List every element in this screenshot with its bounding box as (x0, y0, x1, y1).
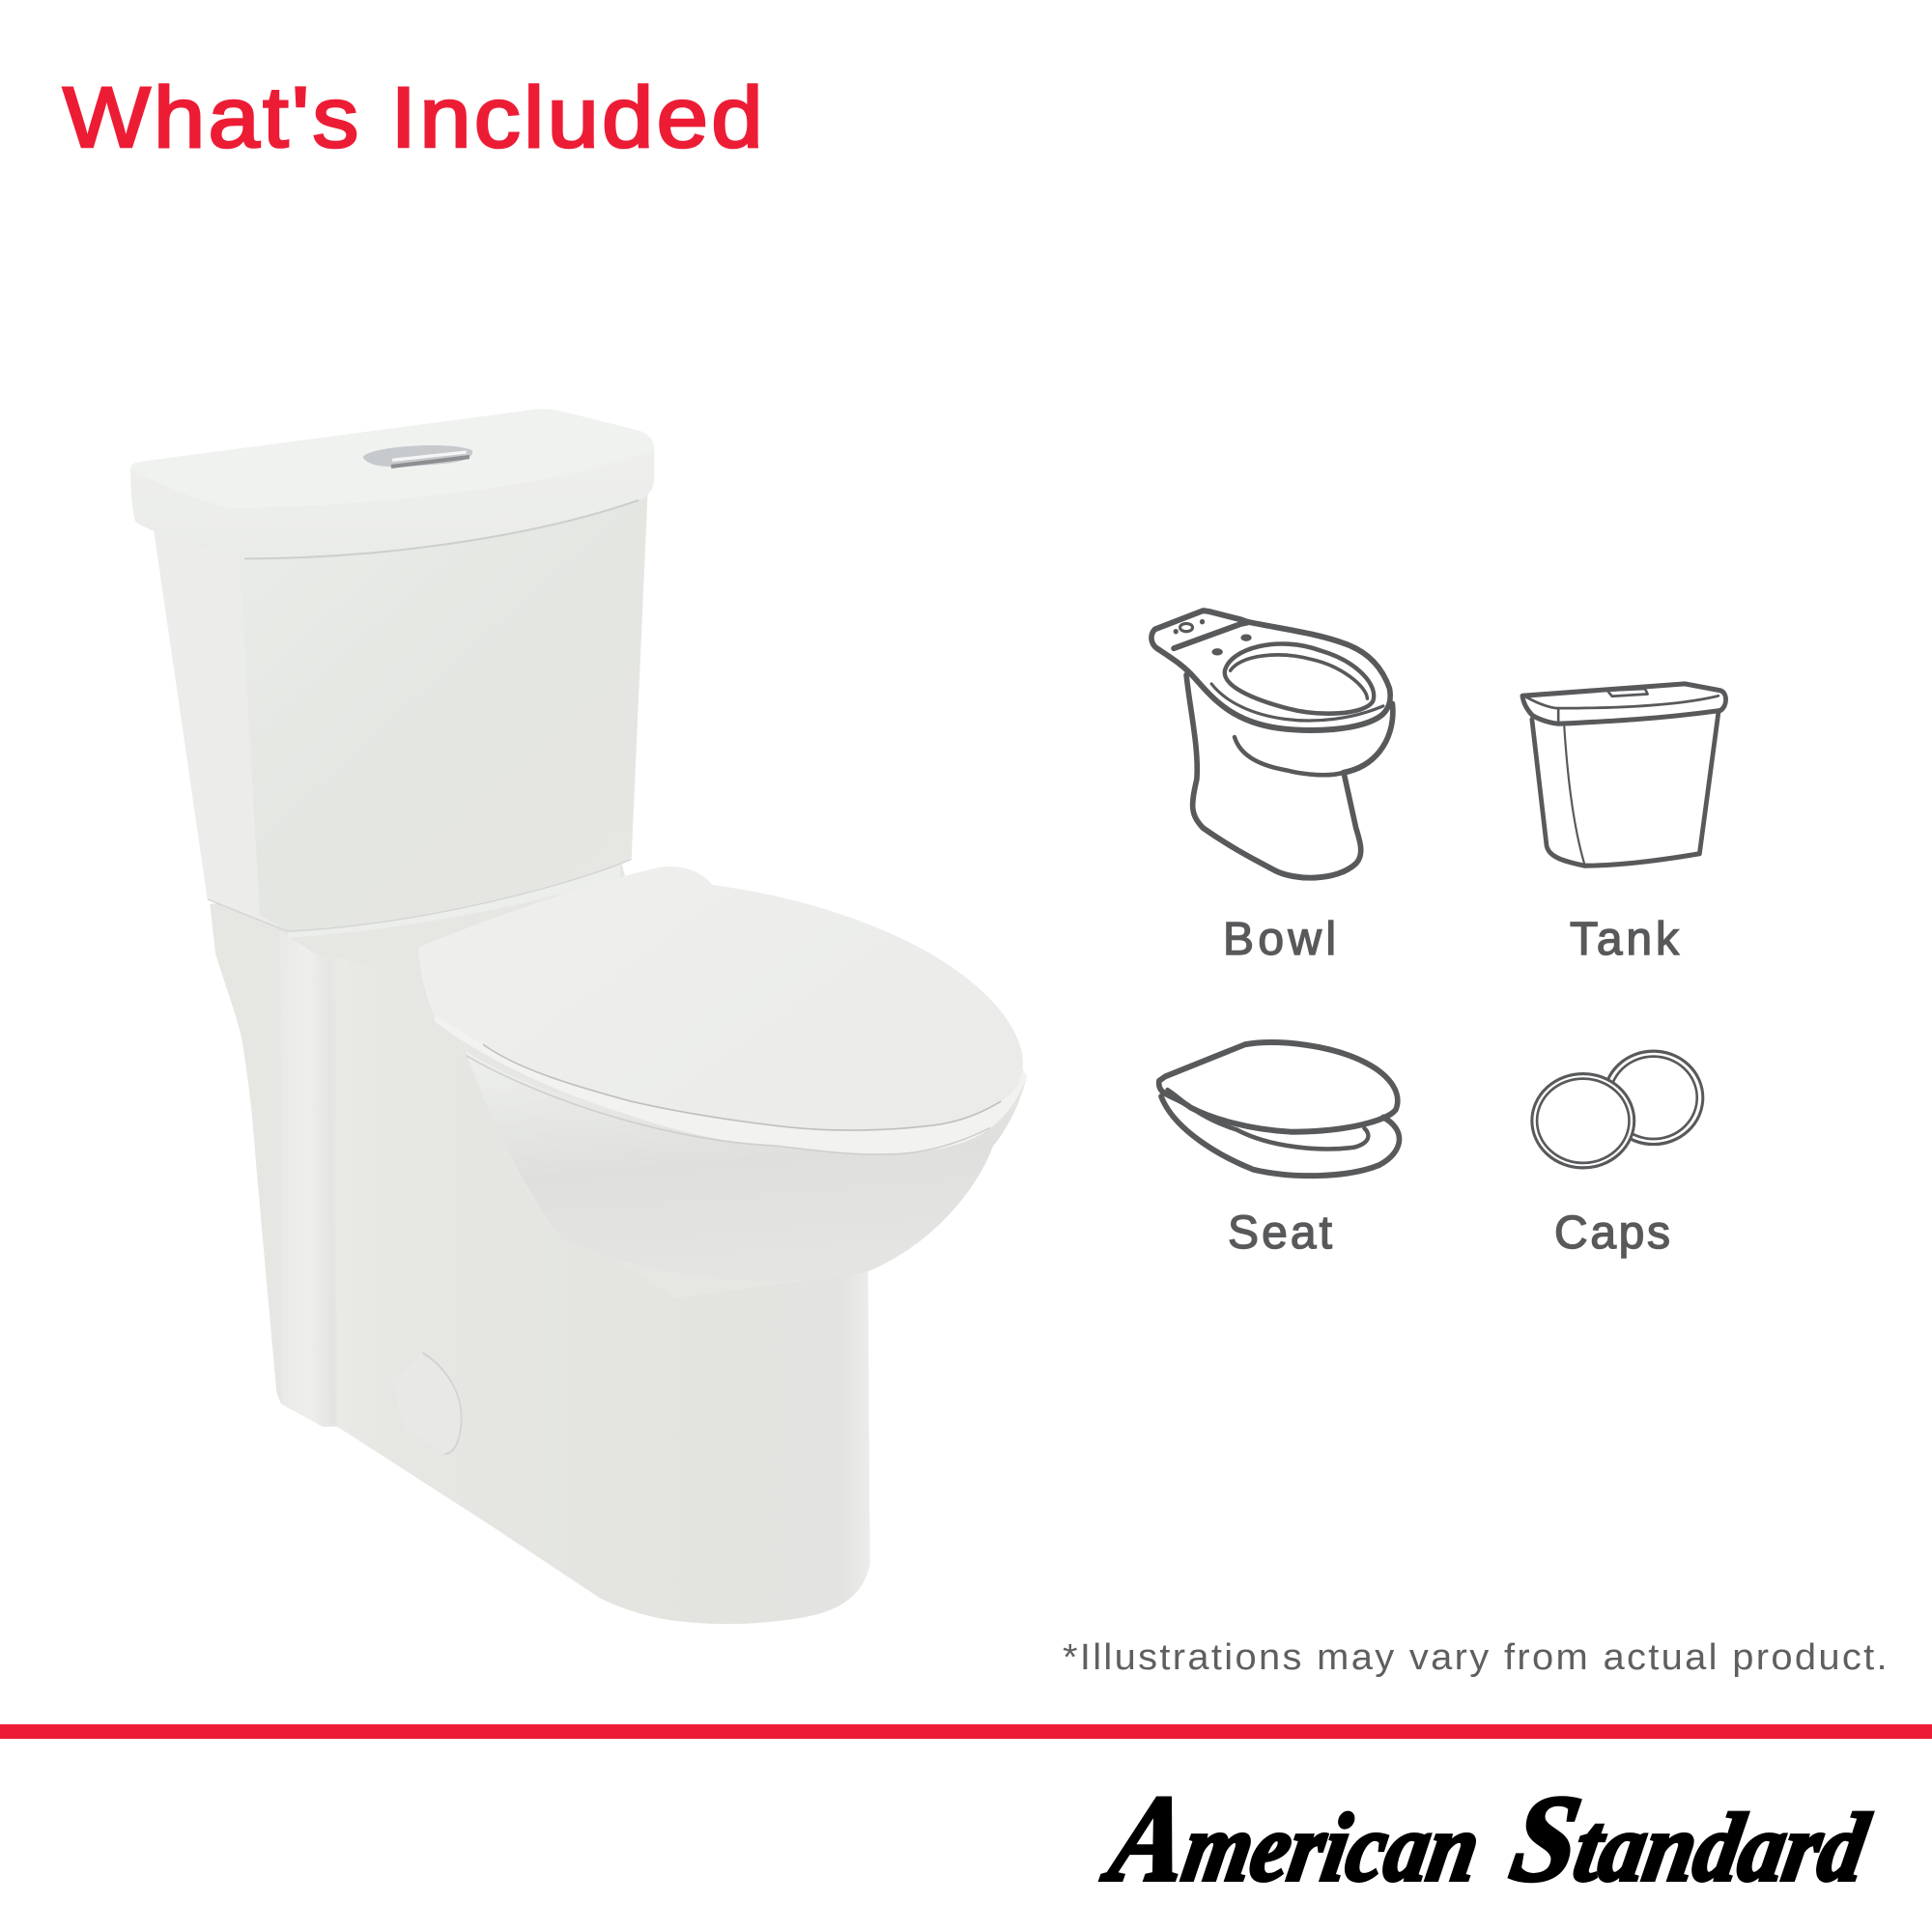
bowl (467, 1052, 1027, 1281)
flush button (363, 445, 472, 467)
footnote: *Illustrations may vary from actual product. (1063, 1637, 1888, 1678)
side bolt cap (392, 1352, 462, 1454)
seat ring (435, 1011, 1027, 1154)
red divider (0, 1724, 1932, 1739)
tank body (154, 487, 648, 938)
logo: American Standard (1095, 1770, 1881, 1907)
label: Tank: Tank (1570, 914, 1680, 965)
seat lid (418, 867, 1023, 1130)
title: What's Included (63, 69, 763, 165)
icon: seat (1159, 1042, 1400, 1176)
pedestal and base (210, 859, 869, 1624)
icon: caps (1532, 1051, 1703, 1168)
tank lid (130, 410, 654, 558)
logo: American Standard: American (1095, 1770, 1492, 1907)
icon: bowl (1151, 611, 1393, 878)
label: Bowl: Bowl (1223, 914, 1336, 965)
product photo: toilet (130, 410, 1027, 1624)
icon: tank (1522, 684, 1726, 866)
label: Seat: Seat (1228, 1208, 1332, 1259)
label: Caps: Caps (1554, 1208, 1670, 1259)
logo: American Standard: Standard (1502, 1770, 1881, 1907)
